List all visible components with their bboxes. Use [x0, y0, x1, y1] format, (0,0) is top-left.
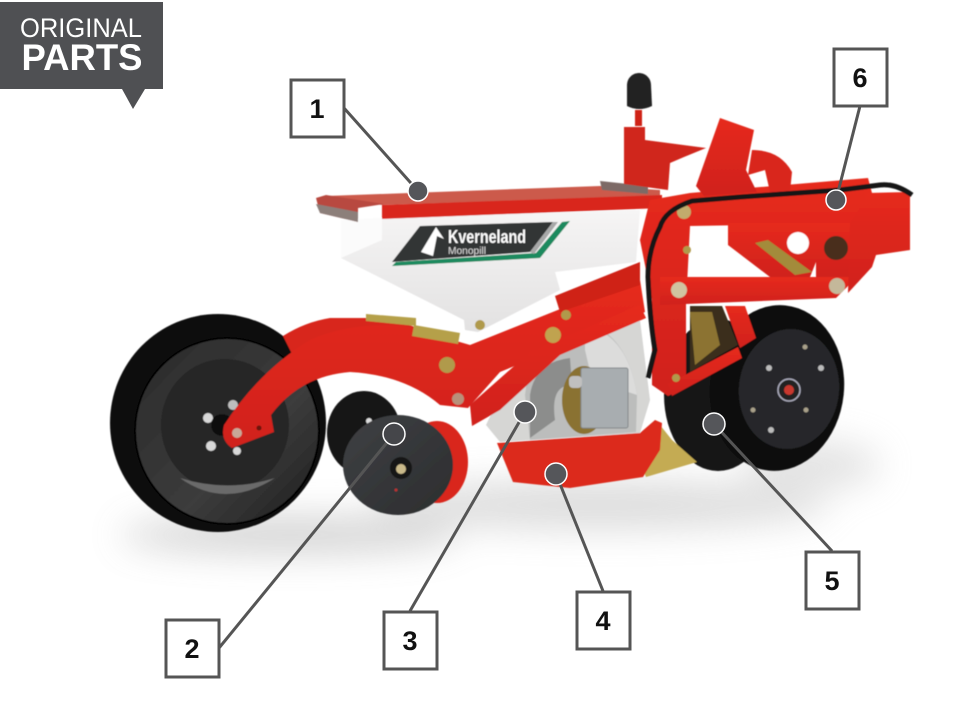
callout 6 [826, 49, 887, 210]
callout 5: 5 [824, 566, 840, 596]
callout 1: 1 [309, 94, 325, 124]
control box [581, 368, 628, 428]
callout 3: 3 [402, 626, 418, 656]
hopper body [341, 210, 640, 332]
callout 3 [384, 401, 536, 669]
badge: original parts: ORIGINAL [20, 13, 142, 43]
seed disc wheels [327, 391, 468, 515]
rear press wheel [664, 298, 852, 478]
main gauge wheel [110, 314, 326, 532]
hydraulic hose [648, 185, 912, 378]
callout 1 [291, 80, 428, 201]
badge: original parts: PARTS [22, 37, 142, 78]
machine illustration [110, 73, 912, 532]
rear toothed arm [283, 318, 440, 360]
main arm and diagonal beams [223, 262, 646, 448]
hopper logo: Monopill [448, 246, 486, 257]
motor housing [486, 320, 650, 442]
hopper logo: Kverneland [448, 227, 526, 247]
badge: original parts [0, 2, 163, 109]
callout 4: 4 [595, 606, 611, 636]
callout 6: 6 [852, 63, 868, 93]
callout 2: 2 [184, 634, 200, 664]
yellow plate [640, 425, 697, 477]
red coulter shield [497, 420, 662, 488]
callout 5 [703, 413, 859, 609]
upper frame [640, 118, 910, 396]
frame details [232, 205, 848, 438]
hopper lid [316, 181, 662, 222]
ground shadow [120, 441, 880, 553]
callout 4 [545, 463, 630, 649]
callout 2 [166, 423, 405, 677]
control knob and bracket [624, 73, 706, 190]
hopper logo [392, 221, 570, 266]
